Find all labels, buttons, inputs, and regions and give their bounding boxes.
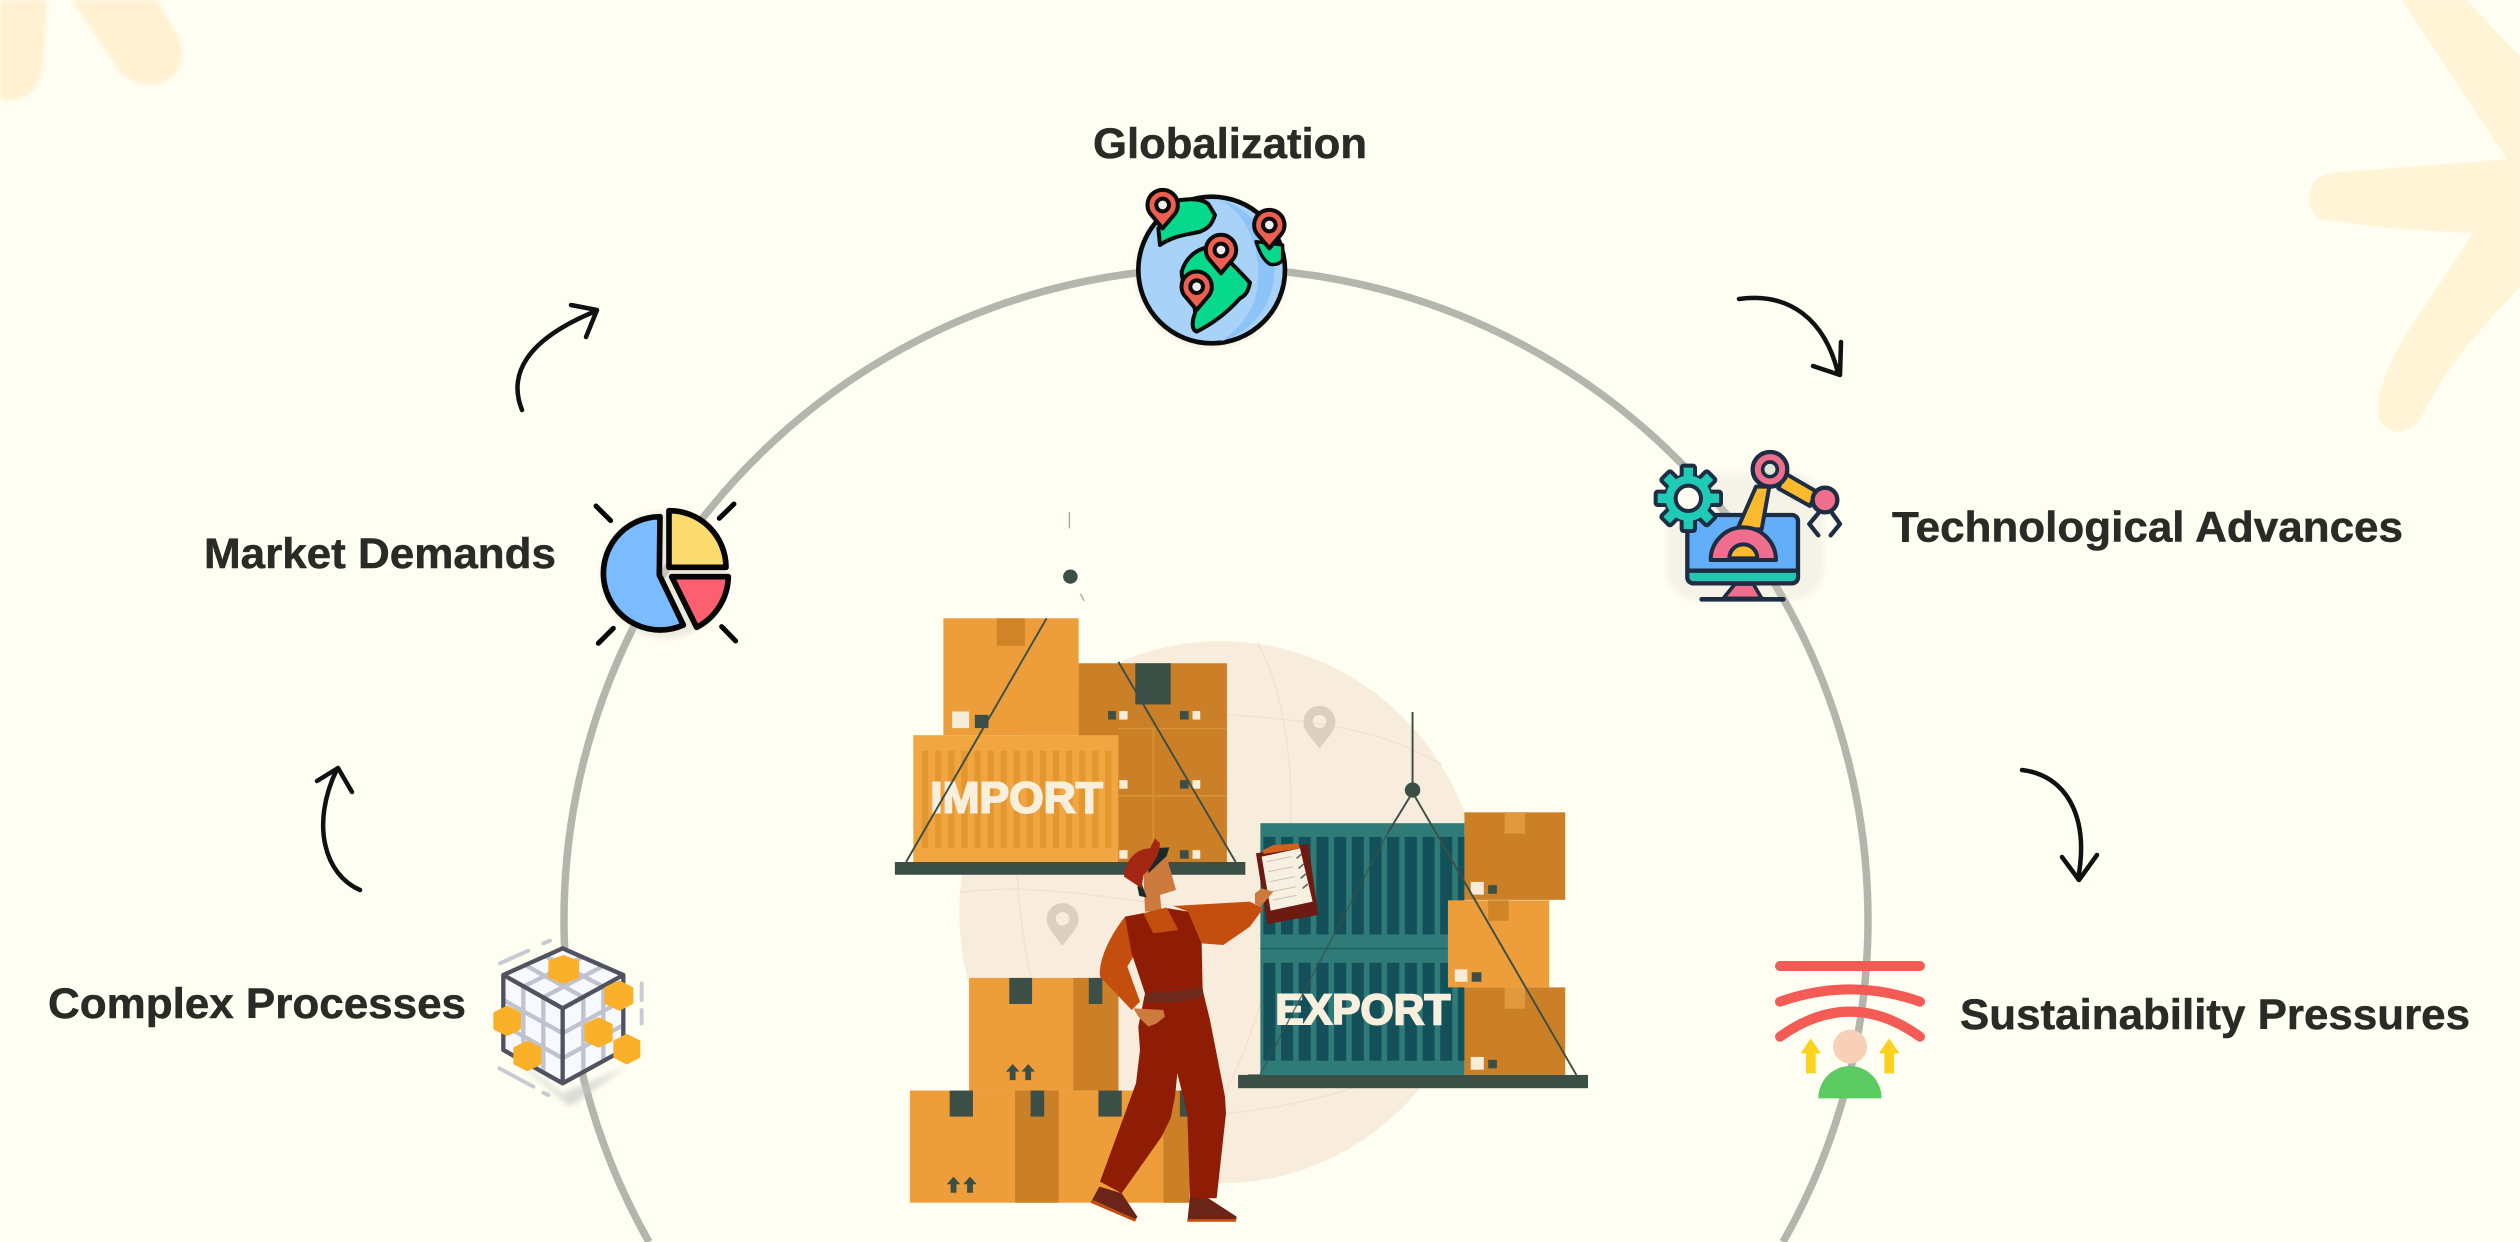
cycle ring	[564, 268, 1868, 1242]
worker with clipboard	[1091, 838, 1318, 1222]
heading: Technological Advances: Technological Advances	[1892, 504, 2403, 552]
icon: pie chart	[596, 504, 736, 643]
export load	[1238, 712, 1588, 1088]
arrow: technological advances to sustainability pressures	[2022, 770, 2097, 880]
arrow: market demands to globalization	[517, 305, 597, 410]
export label: EXPORT	[1275, 986, 1450, 1034]
arrow: complex processes to market demands	[317, 768, 360, 890]
icon: sustainability person under pressure	[1780, 966, 1920, 1098]
clipboard	[1256, 843, 1318, 924]
globe backdrop	[959, 641, 1485, 1183]
icon: globe with pins	[1137, 190, 1287, 347]
icon: robot arm and monitor	[1656, 452, 1840, 600]
stacked boxes on ground	[910, 978, 1190, 1203]
arrow: globalization to technological advances	[1739, 298, 1841, 375]
map pin upper	[1304, 706, 1335, 748]
import load	[895, 512, 1245, 875]
central illustration: import export	[895, 512, 1588, 1222]
map pin lower	[1047, 903, 1079, 946]
icon: cube with blocks	[495, 941, 642, 1107]
decorative blob: top left	[0, 0, 182, 100]
import label: IMPORT	[930, 774, 1103, 822]
heading: Globalization: Globalization	[1093, 120, 1367, 168]
heading: Market Demands: Market Demands	[204, 530, 556, 578]
heading: Complex Processes: Complex Processes	[48, 980, 466, 1028]
heading: Sustainability Pressures: Sustainability Pressures	[1960, 991, 2470, 1039]
decorative blob: top right	[2309, 0, 2520, 432]
